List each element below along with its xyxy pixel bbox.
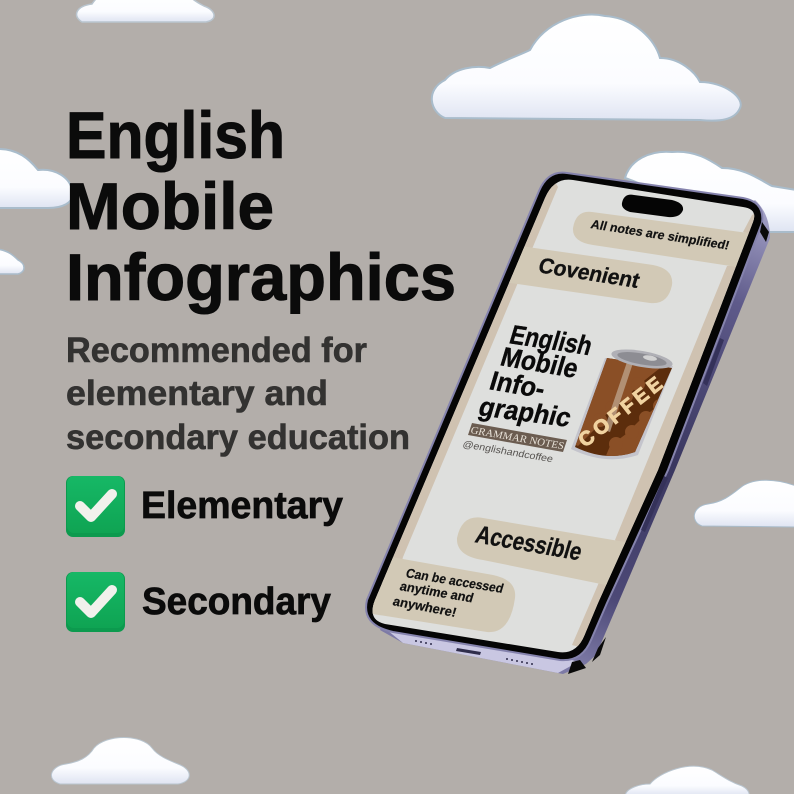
checklist item: elementary [66,476,343,537]
icon: coffee can: COFFEE [575,373,667,452]
cloud: large top right [432,14,741,121]
pill: accessible [457,517,626,585]
icon: green check [66,476,125,537]
title: English [66,98,285,172]
mini title: Mobile [497,342,582,384]
title [66,98,456,314]
mini title: Info- [486,366,549,404]
cloud: top left [77,0,214,22]
antenna bands [568,222,769,674]
phone side body [380,200,770,674]
title: Mobile [66,169,274,243]
mini title: English [506,320,596,361]
pill: can be accessed [372,558,516,632]
bottom edge strip [382,626,578,673]
phone frame [366,173,762,660]
icon: green check [66,572,125,632]
pill: can be accessed: Can be accessed [404,565,505,596]
charging port and speaker dots [415,640,533,665]
checklist item: secondary: Secondary [142,581,331,623]
pill: can be accessed: anytime and [398,578,475,605]
mini title [478,325,591,426]
phone [360,170,770,674]
cloud: bottom left [51,738,189,784]
dynamic island [622,195,683,217]
icon: coffee can [571,350,673,460]
subtitle: elementary and [66,374,328,413]
handle: @englishandcoffee [461,439,554,465]
pill: convenient [509,246,672,304]
cloud: left [0,149,73,208]
pill: can be accessed: anywhere! [391,593,458,620]
pill: all notes [573,212,749,266]
pill: convenient: Covenient [536,253,643,293]
title: Infographics [66,240,456,314]
cloud: small left [0,249,24,274]
subtitle: secondary education [66,418,410,457]
cloud: behind phone [625,152,794,232]
grammar notes banner: GRAMMAR NOTES [469,425,566,452]
mini title: graphic [475,392,575,433]
subtitle [66,331,410,457]
checklist item: elementary: Elementary [141,485,343,527]
pill: all notes: All notes are simplified! [589,217,731,253]
cloud: lower right [694,480,794,527]
phone screen [372,180,754,652]
subtitle: Recommended for [66,331,367,370]
side buttons [703,338,724,386]
left beige strip [373,184,558,606]
cloud: bottom right [625,766,749,794]
pill: accessible: Accessible [472,522,585,566]
checklist item: secondary [66,572,331,632]
right beige strip [572,210,770,650]
